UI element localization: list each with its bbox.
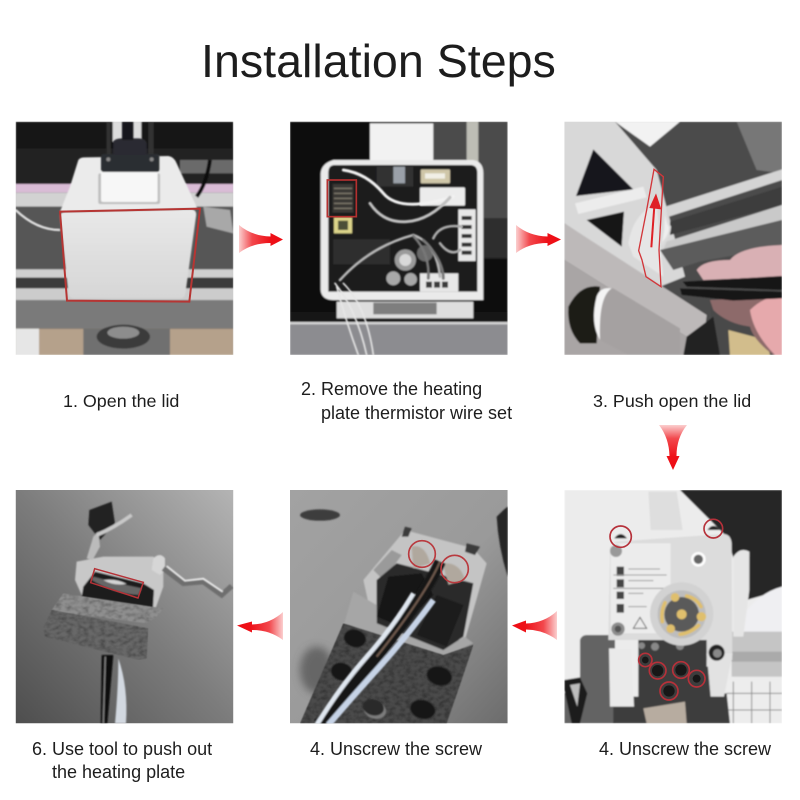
step 2 caption: [301, 379, 512, 423]
foam block front face: [42, 610, 148, 660]
step 6 caption: the heating plate: [52, 762, 185, 782]
step 1 caption: 1. Open the lid: [63, 391, 179, 411]
panel: step 3 photo, push open the lid: [564, 122, 782, 355]
step 4 caption: 4. Unscrew the screw: [599, 739, 772, 759]
red circles on screws: [409, 541, 468, 583]
step 6 caption: 6. Use tool to push out: [32, 739, 212, 759]
neck and cable connector: [98, 122, 160, 204]
lid front face: [60, 209, 196, 298]
step 5 caption: 4. Unscrew the screw: [310, 739, 483, 759]
title: Installation Steps: [201, 35, 556, 87]
panel: step 6 photo, unscrew the screw: [564, 490, 782, 723]
step 2 caption: 2. Remove the heating: [301, 379, 482, 399]
red highlight rectangle: [91, 569, 143, 598]
arrow: step 5 photo to step 4 photo: [237, 612, 283, 640]
arrow: step 2 to step 3: [516, 225, 561, 253]
arrow: step 1 to step 2: [239, 225, 283, 253]
red highlight outline with up arrow: [639, 169, 663, 287]
lid top face: [60, 156, 197, 212]
red highlight outline: [60, 209, 200, 302]
step 2 caption: plate thermistor wire set: [321, 403, 512, 423]
foam block top face: [52, 593, 163, 623]
arrow: step 6 photo to step 5 photo: [512, 611, 557, 640]
thermistor wires: [317, 562, 440, 725]
panel: step 1 photo, open the lid: [16, 122, 233, 355]
step 6 caption: [32, 739, 212, 782]
panel: step 2 photo, thermistor wire set: [290, 122, 508, 355]
yellow gear ring: [658, 590, 706, 638]
wire harnesses: [335, 170, 462, 355]
step 3 caption: 3. Push open the lid: [593, 391, 751, 411]
foam block texture: [300, 623, 473, 723]
arrow: step 3 to step 6 photo: [659, 425, 687, 470]
screws and red circles: [610, 519, 723, 700]
red highlight square: [327, 180, 356, 217]
panel: step 5 photo, unscrew the screw: [290, 490, 508, 725]
panel: step 4 photo, push out the heating plate: [16, 490, 233, 723]
